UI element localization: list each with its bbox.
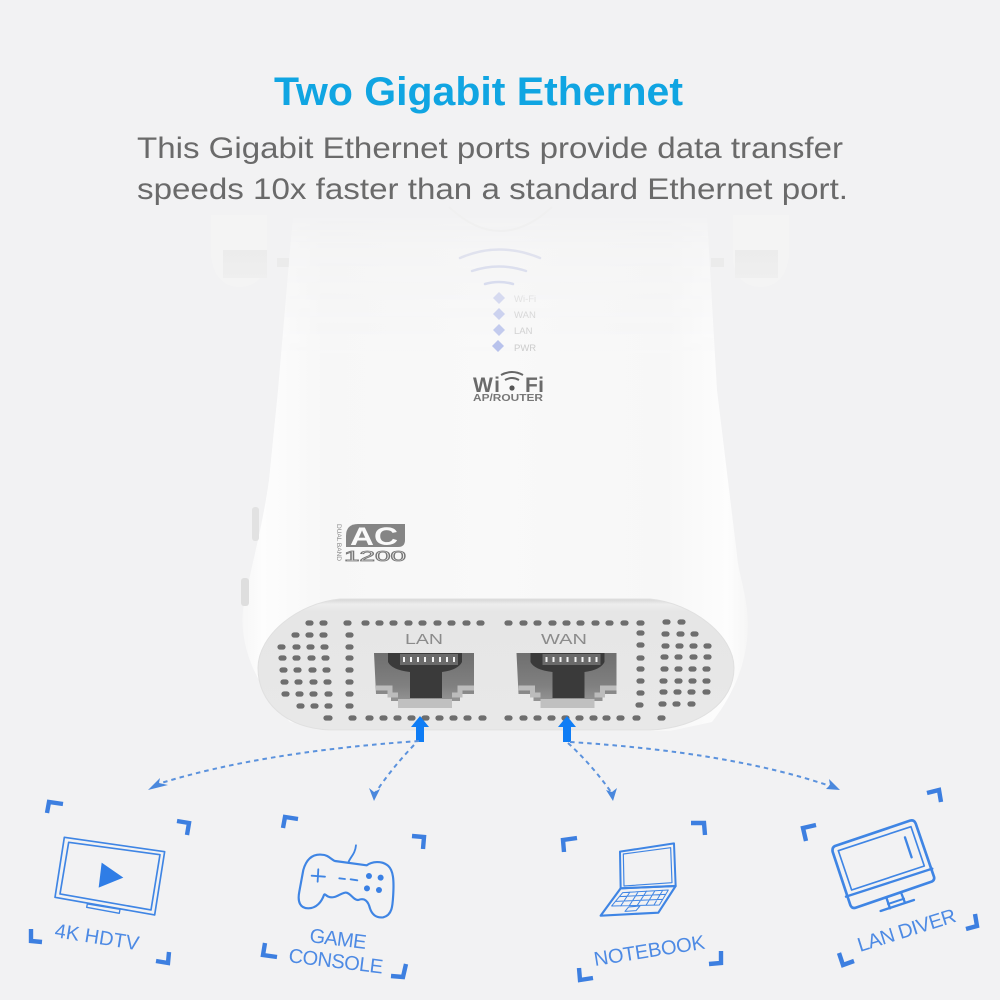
status indicators xyxy=(492,292,536,354)
router device xyxy=(241,248,736,730)
arrow to TV xyxy=(148,741,419,790)
status indicators: PWR xyxy=(514,343,536,354)
AC1200 badge xyxy=(335,523,406,565)
label xyxy=(287,925,384,979)
label: CONSOLE xyxy=(287,945,384,979)
WAN port label: WAN xyxy=(541,632,587,648)
WAN port xyxy=(516,653,616,708)
LAN port label: LAN xyxy=(405,632,443,648)
label: 4K HDTV xyxy=(53,920,141,955)
status indicators: WAN xyxy=(514,310,536,321)
corner brackets xyxy=(803,790,977,965)
label: LAN DIVER xyxy=(855,905,959,957)
icon: television xyxy=(55,837,165,915)
connection arrows xyxy=(148,741,840,801)
arrow to LAN device xyxy=(570,742,840,790)
description xyxy=(137,132,848,206)
AC1200 badge: DUAL BAND xyxy=(335,524,342,561)
device: game console xyxy=(263,817,424,979)
status indicators: LAN xyxy=(514,326,533,337)
arrow: WAN port xyxy=(558,716,576,742)
icon: desktop monitor xyxy=(833,820,934,911)
top dial arc xyxy=(449,207,552,231)
icon: laptop xyxy=(601,843,676,916)
description: This Gigabit Ethernet ports provide data transfer xyxy=(137,132,843,165)
wi-fi logo: Fi xyxy=(525,374,544,397)
ventilation holes xyxy=(280,622,709,718)
arrow to notebook xyxy=(568,743,617,801)
device: 4K HDTV xyxy=(31,802,189,963)
title: Two Gigabit Ethernet xyxy=(274,70,683,114)
antennas xyxy=(211,215,789,287)
AC1200 badge: 1200 xyxy=(344,549,406,565)
device: notebook xyxy=(563,823,721,980)
wi-fi logo xyxy=(473,372,544,404)
wi-fi logo: AP/ROUTER xyxy=(473,393,544,404)
label: NOTEBOOK xyxy=(592,932,707,971)
side buttons xyxy=(241,507,259,606)
wi-fi logo: Wi xyxy=(473,374,500,397)
LAN port xyxy=(374,653,474,708)
corner brackets xyxy=(563,823,721,980)
bottom panel xyxy=(258,599,734,730)
arrow to console xyxy=(369,745,414,801)
corner brackets xyxy=(31,802,189,963)
wifi signal arcs xyxy=(460,250,540,284)
label: GAME xyxy=(308,925,368,954)
AC1200 badge: AC xyxy=(350,523,398,551)
status indicators: Wi-Fi xyxy=(514,294,536,305)
description: speeds 10x faster than a standard Ethernet port. xyxy=(137,173,848,206)
icon: gamepad xyxy=(299,845,394,917)
corner brackets xyxy=(263,817,424,977)
router body xyxy=(252,317,736,724)
device: LAN diver xyxy=(803,790,977,965)
arrow: LAN port xyxy=(411,716,429,742)
